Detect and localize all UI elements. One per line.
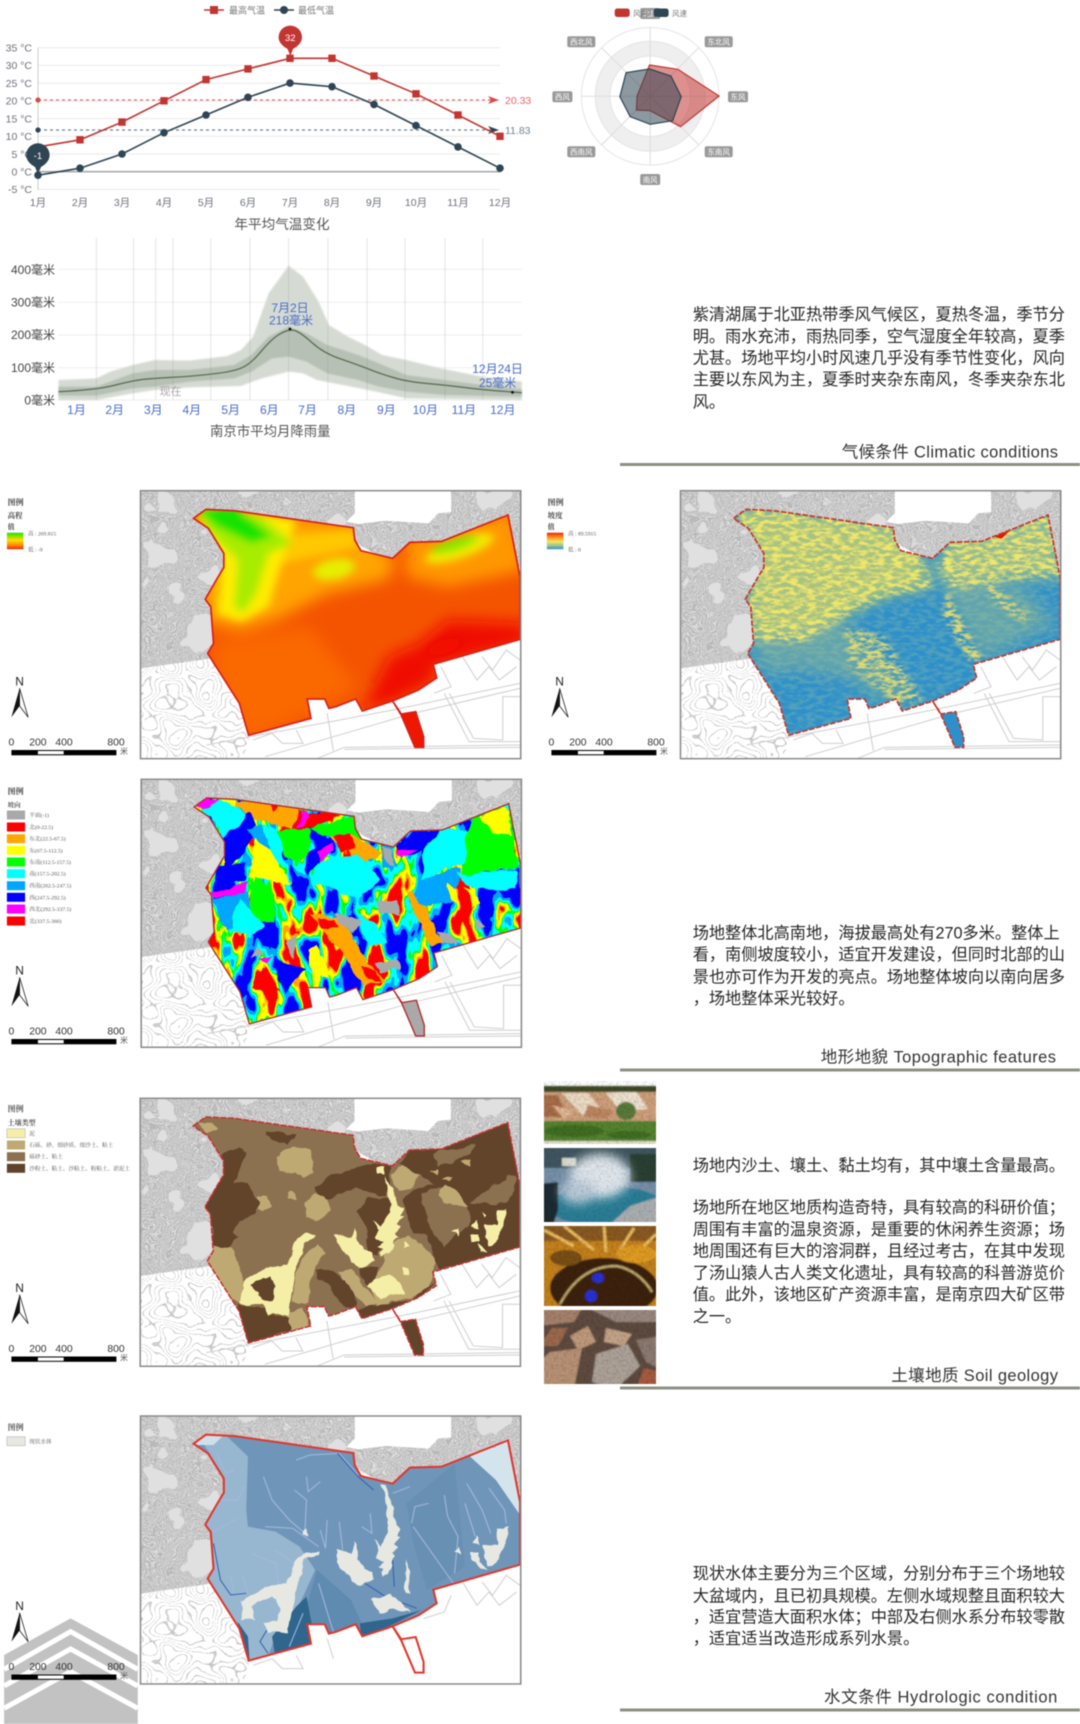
text: climate description: 尤甚。场地平均小时风速几乎没有季节性变化，风向 xyxy=(693,350,1065,368)
x axis labels: 1月 xyxy=(30,197,46,209)
photo: karst cave xyxy=(543,1225,657,1307)
north arrow and scale bar: 200 xyxy=(29,1026,47,1038)
north arrow and scale bar: 米 xyxy=(120,1670,128,1680)
y axis labels xyxy=(6,42,32,196)
text: topographic description: 场地整体北高南地，海拔最高处有270多米。整体上 xyxy=(693,924,1060,942)
north arrow and scale bar: 800 xyxy=(107,738,125,748)
x axis labels: 12月 xyxy=(489,197,511,209)
caption: climatic conditions: 气候条件 Climatic conditions xyxy=(842,442,1058,462)
soil legend: 泥 xyxy=(29,1129,35,1137)
x axis labels: 2月 xyxy=(72,197,88,209)
map: soil xyxy=(7,1098,523,1366)
map: hydrology xyxy=(7,1416,523,1684)
radar grid xyxy=(581,28,719,165)
north arrow and scale bar: 400 xyxy=(55,1662,73,1673)
slope legend: 坡度 xyxy=(548,510,563,520)
aspect legend: 北(0-22.5) xyxy=(29,823,53,831)
rainfall annotations xyxy=(160,301,523,398)
chart: wind radar xyxy=(552,8,748,185)
x axis labels: 9月 xyxy=(366,197,382,209)
slope legend: 低 : 0 xyxy=(568,546,581,554)
north arrow and scale bar: N xyxy=(15,674,24,688)
y axis labels: 5 °C xyxy=(11,149,32,161)
x axis labels: 3月 xyxy=(114,197,130,209)
photo: quarry cliff xyxy=(543,1080,657,1144)
slope legend: 值 xyxy=(548,522,555,531)
text: climate description: 紫清湖属于北亚热带季风气候区，夏热冬温，季节分 xyxy=(693,306,1065,324)
text: soil geology description: 了汤山猿人古人类文化遗址，具有较高的科普游览价 xyxy=(693,1264,1065,1282)
text: topographic description xyxy=(693,924,1065,1008)
direction labels: 北风 xyxy=(643,9,658,18)
series: min temperature xyxy=(34,79,504,179)
north arrow and scale bar: N xyxy=(15,1281,24,1295)
text: climate description: 主要以东风为主，夏季时夹杂东南风，冬季夹杂东北 xyxy=(693,371,1065,389)
soil raster xyxy=(140,1098,523,1366)
series: wind direction xyxy=(636,65,719,127)
rainfall annotations: 25毫米 xyxy=(479,375,516,390)
north arrow and scale bar: 米 xyxy=(120,1035,128,1045)
y axis labels: 10 °C xyxy=(6,131,32,143)
north arrow and scale bar: N xyxy=(555,674,564,688)
y axis labels: 30 °C xyxy=(6,60,32,72)
radar legend: 风向 xyxy=(633,8,648,18)
rainfall annotations: 218毫米 xyxy=(269,312,313,328)
month labels: 5月 xyxy=(221,403,240,417)
aspect legend: 西北(292.5-337.5) xyxy=(29,905,71,913)
map: slope xyxy=(547,491,1063,759)
text: soil geology description: 值。此外，该地区矿产资源丰富，是南京四大矿区带 xyxy=(693,1286,1065,1304)
month labels xyxy=(67,403,515,417)
elevation legend: 值 xyxy=(8,522,15,531)
text: topographic description: 看，南侧坡度较小，适宜开发建设，但同时北部的山 xyxy=(693,946,1065,964)
rainfall annotations: 12月24日 xyxy=(472,362,523,376)
text: hydrology description xyxy=(693,1565,1065,1648)
aspect raster xyxy=(141,779,524,1047)
legend: temperature series: 最低气温 xyxy=(298,4,334,16)
text: soil geology description: 场地内沙土、壤土、黏土均有，其中壤土含量最高。 xyxy=(693,1156,1065,1175)
north arrow and scale bar: 400 xyxy=(595,738,613,748)
x axis labels xyxy=(30,197,511,209)
text: hydrology description: ，适宜营造大面积水体；中部及右侧水系分布较零散 xyxy=(693,1608,1065,1626)
pin: maximum 32: 32 xyxy=(285,33,296,44)
photos: geology xyxy=(539,1081,664,1389)
pin: minimum -1 xyxy=(26,143,50,174)
series: wind speed xyxy=(620,69,681,124)
north arrow and scale bar: 200 xyxy=(29,1662,47,1673)
elevation legend xyxy=(7,497,56,554)
hydrology legend xyxy=(7,1422,52,1446)
x axis labels: 7月 xyxy=(282,197,298,209)
soil legend: 砾砂土、粘土 xyxy=(29,1153,63,1161)
x axis labels: 6月 xyxy=(240,197,256,209)
soil legend: 土壤类型 xyxy=(8,1118,36,1127)
soil legend: 沙粉土、粘土、沙粘土、粉粘土、淤泥土 xyxy=(29,1164,130,1172)
soil legend xyxy=(7,1104,130,1173)
month labels: 10月 xyxy=(413,403,438,417)
direction labels: 东北风 xyxy=(707,36,730,46)
aspect legend: 图例 xyxy=(8,786,24,796)
north arrow and scale bar: 400 xyxy=(55,738,73,748)
hydrology raster xyxy=(140,1416,523,1684)
hydrology legend: 现状水体 xyxy=(29,1437,52,1445)
north arrow and scale bar: 800 xyxy=(647,738,665,748)
elevation legend: 低 : -9 xyxy=(28,546,43,554)
rainfall annotations: 现在 xyxy=(160,385,182,398)
photo: hot spring xyxy=(543,1147,657,1223)
rainfall y labels xyxy=(11,262,55,408)
direction labels: 西北风 xyxy=(570,38,593,46)
photo: rock slabs xyxy=(543,1309,657,1385)
caption: soil geology: 土壤地质 Soil geology xyxy=(891,1365,1059,1385)
text: hydrology description: 现状水体主要分为三个区域，分别分布于三个场地较 xyxy=(693,1565,1065,1583)
chart title: 年平均气温变化 xyxy=(234,217,330,232)
aspect legend: 平面(-1) xyxy=(29,811,49,819)
legend: temperature series xyxy=(204,4,334,16)
radar legend xyxy=(615,8,687,18)
x axis labels: 4月 xyxy=(156,197,172,209)
x axis labels: 8月 xyxy=(324,197,340,209)
north arrow and scale bar: 400 xyxy=(55,1344,73,1355)
rainfall y labels: 100毫米 xyxy=(11,360,55,375)
aspect legend: 东(67.5-112.5) xyxy=(29,846,63,854)
north arrow and scale bar: N xyxy=(15,1599,24,1613)
north arrow and scale bar xyxy=(9,674,128,756)
caption: topographic features: 地形地貌 Topographic features xyxy=(821,1048,1056,1066)
north arrow and scale bar: 800 xyxy=(107,1344,125,1355)
text: soil geology description: 周围有丰富的温泉资源，是重要的休闲养生资源；场 xyxy=(693,1221,1065,1239)
north arrow and scale bar: 400 xyxy=(55,1026,73,1038)
north arrow and scale bar: 200 xyxy=(29,738,47,748)
rainfall y labels: 200毫米 xyxy=(11,327,55,342)
month labels: 2月 xyxy=(105,403,124,417)
north arrow and scale bar xyxy=(9,1281,128,1362)
elevation legend: 图例 xyxy=(8,497,24,507)
north arrow and scale bar xyxy=(9,1599,128,1680)
x axis labels: 5月 xyxy=(198,197,214,209)
pin: minimum -1: -1 xyxy=(34,151,42,162)
text: climate description: 风。 xyxy=(693,394,725,412)
series: max temperature xyxy=(38,55,504,147)
text: climate description xyxy=(693,306,1065,412)
text: soil geology description: 之一。 xyxy=(693,1308,741,1326)
month labels: 6月 xyxy=(260,403,279,417)
legend: temperature series: 最高气温 xyxy=(229,4,265,16)
month labels: 8月 xyxy=(337,403,356,417)
direction labels: 西风 xyxy=(555,92,570,102)
rainfall y labels: 0毫米 xyxy=(24,392,55,408)
north arrow and scale bar: 0 xyxy=(549,738,555,748)
y axis labels: 15 °C xyxy=(6,113,32,125)
direction labels xyxy=(552,8,748,185)
month labels: 12月 xyxy=(490,403,515,417)
aspect legend xyxy=(7,786,71,926)
aspect legend: 北(337.5-360) xyxy=(29,917,62,925)
aspect legend: 南(157.5-202.5) xyxy=(29,870,66,878)
month labels: 3月 xyxy=(144,403,163,417)
text: climate description: 明。雨水充沛，雨热同季，空气湿度全年较高，夏季 xyxy=(693,328,1065,346)
aspect legend: 西(247.5-292.5) xyxy=(29,893,66,901)
y axis labels: -5 °C xyxy=(8,184,32,196)
text: soil geology description xyxy=(693,1156,1065,1326)
direction labels: 东风 xyxy=(730,92,746,102)
y axis labels: 0 °C xyxy=(11,166,32,178)
north arrow and scale bar: 米 xyxy=(660,746,668,756)
month labels: 1月 xyxy=(67,403,86,417)
hydrology legend: 图例 xyxy=(8,1422,24,1432)
soil legend: 图例 xyxy=(8,1104,24,1114)
slope legend xyxy=(547,497,596,554)
north arrow and scale bar: 米 xyxy=(120,746,128,756)
north arrow and scale bar: N xyxy=(15,964,24,978)
text: hydrology description: ，适宜适当改造形成系列水景。 xyxy=(693,1630,919,1648)
y axis labels: 35 °C xyxy=(6,42,32,54)
aspect legend: 坡向 xyxy=(8,800,21,809)
y axis labels: 20 °C xyxy=(6,96,32,108)
north arrow and scale bar: 0 xyxy=(9,1344,15,1355)
average lines xyxy=(35,95,531,137)
month labels: 4月 xyxy=(182,403,201,417)
text: soil geology description: 地周围还有巨大的溶洞群，且经过考古，在其中发现 xyxy=(693,1242,1065,1260)
decoration: grey chevron block xyxy=(4,1618,138,1724)
map: elevation xyxy=(7,491,527,759)
y axis labels: 25 °C xyxy=(6,78,32,90)
caption: hydrologic condition: 水文条件 Hydrologic condition xyxy=(824,1688,1057,1706)
rainfall annotations: 7月2日 xyxy=(271,301,309,315)
soil legend: 石砾、砂、细砂质、细沙土、粘土 xyxy=(29,1141,114,1149)
aspect legend: 东南(112.5-157.5) xyxy=(29,858,71,866)
slope legend: 高 : 89.5915 xyxy=(568,530,596,538)
text: soil geology description: 场地所在地区地质构造奇特，具有较高的科研价值； xyxy=(693,1199,1065,1217)
north arrow and scale bar xyxy=(9,964,128,1045)
elevation legend: 高 : 269.815 xyxy=(28,530,56,538)
direction labels: 南风 xyxy=(643,174,658,184)
aspect legend: 西南(202.5-247.5) xyxy=(29,882,71,890)
elevation raster xyxy=(140,491,527,759)
chart: annual temperature line chart xyxy=(6,4,531,232)
direction labels: 东南风 xyxy=(707,146,730,156)
north arrow and scale bar: 800 xyxy=(107,1662,125,1673)
north arrow and scale bar: 200 xyxy=(569,738,587,748)
rainfall y labels: 400毫米 xyxy=(11,262,55,277)
north arrow and scale bar xyxy=(549,674,668,756)
month labels: 7月 xyxy=(298,403,317,417)
slope legend: 图例 xyxy=(548,497,564,507)
north arrow and scale bar: 200 xyxy=(29,1344,47,1355)
text: topographic description: ，场地整体采光较好。 xyxy=(693,990,855,1008)
map: aspect xyxy=(7,779,524,1047)
north arrow and scale bar: 0 xyxy=(9,1662,15,1673)
north arrow and scale bar: 米 xyxy=(120,1352,128,1362)
aspect legend: 东北(22.5-67.5) xyxy=(29,835,66,843)
slope raster xyxy=(680,491,1063,759)
chart: monthly rainfall bands xyxy=(11,238,523,439)
month labels: 9月 xyxy=(377,403,396,417)
direction labels: 西南风 xyxy=(570,146,593,156)
north arrow and scale bar: 0 xyxy=(9,738,15,748)
radar legend: 风速 xyxy=(672,9,687,18)
text: hydrology description: 大盆域内，且已初具规模。左侧水域规整且面积较大 xyxy=(693,1588,1065,1606)
north arrow and scale bar: 800 xyxy=(107,1026,125,1038)
rainfall y labels: 300毫米 xyxy=(11,294,55,310)
north arrow and scale bar: 0 xyxy=(9,1026,15,1038)
text: topographic description: 景也亦可作为开发的亮点。场地整体坡向以南向居多 xyxy=(693,968,1065,986)
x axis labels: 11月 xyxy=(447,197,469,209)
x axis labels: 10月 xyxy=(405,197,427,209)
average lines: 11.83 xyxy=(505,125,531,137)
average lines: 20.33 xyxy=(505,95,531,107)
month labels: 11月 xyxy=(452,403,476,417)
elevation legend: 高程 xyxy=(8,510,23,520)
rainfall percentile bands xyxy=(59,266,522,400)
chart title: 南京市平均月降雨量 xyxy=(210,423,331,439)
pin: maximum 32 xyxy=(279,26,302,56)
